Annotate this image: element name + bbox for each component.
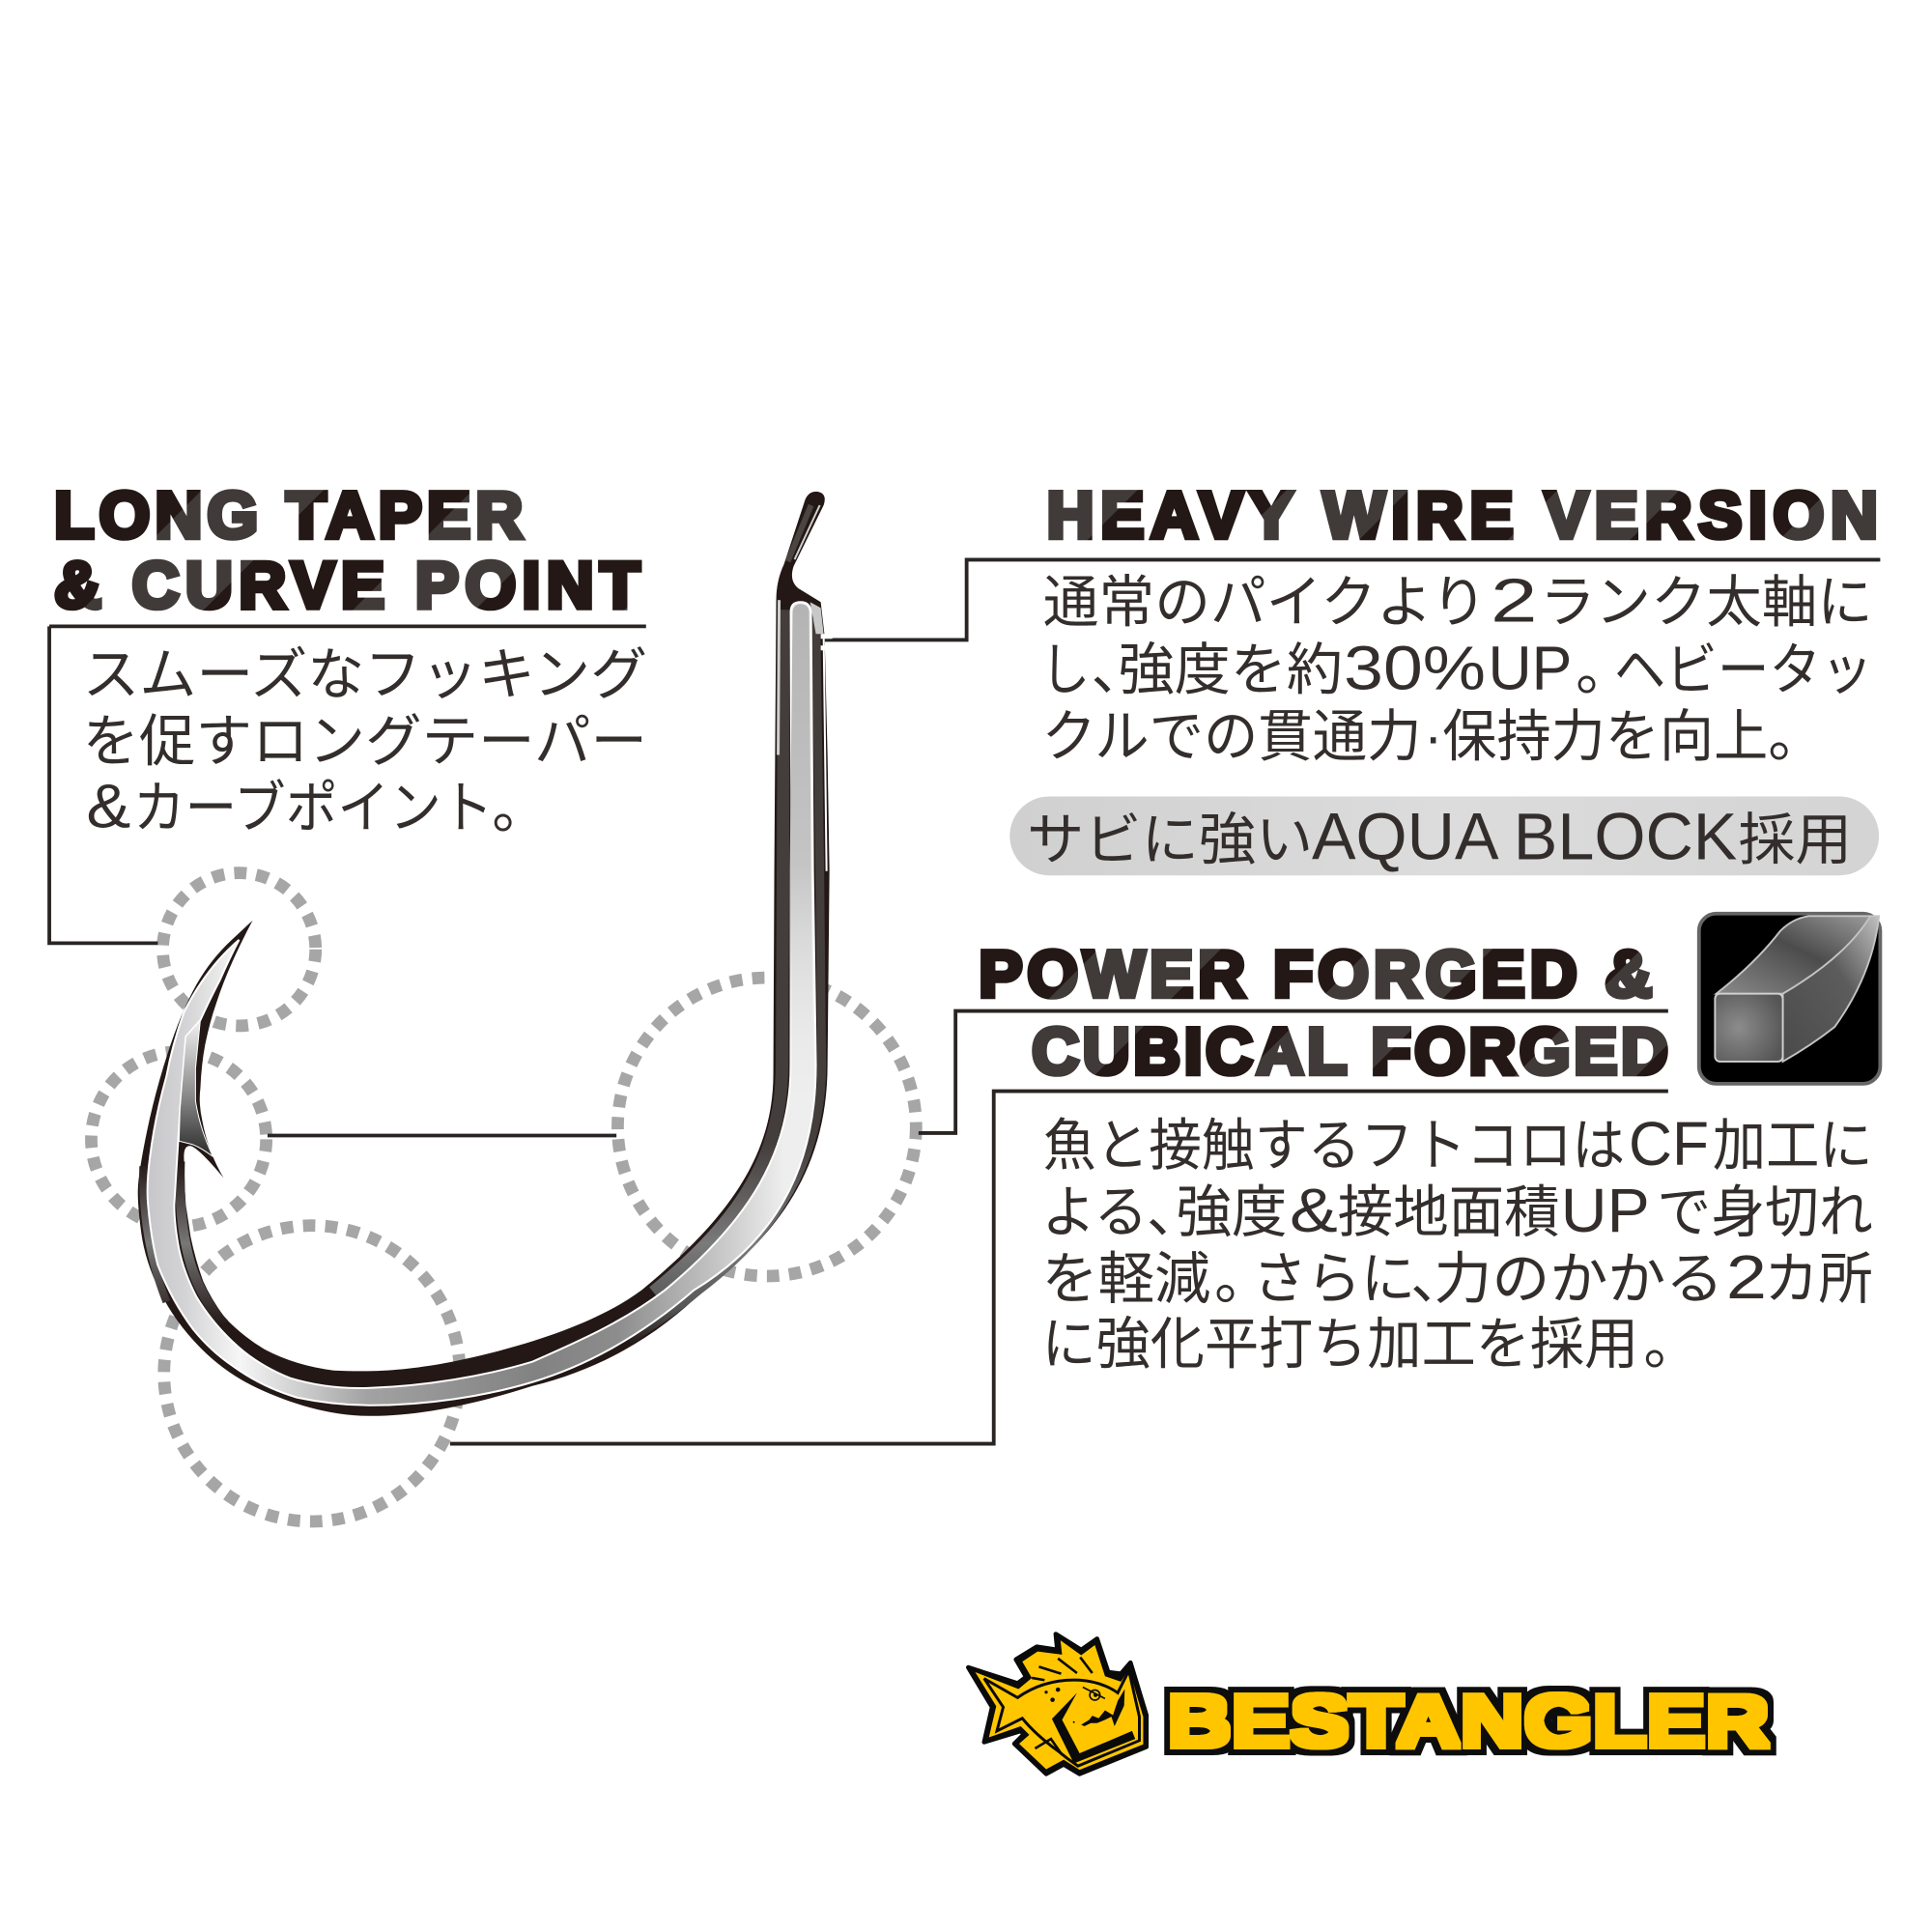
text: power forged: UP <box>1561 1176 1650 1245</box>
fish eye <box>1083 1687 1105 1700</box>
text: power forged <box>1041 1109 1873 1377</box>
text: power forged: 加工に <box>1713 1115 1873 1178</box>
fish jaw <box>1052 1692 1135 1764</box>
heading: long taper: & CURVE POINT <box>54 550 639 622</box>
fish rim <box>976 1640 1143 1770</box>
hook silhouette <box>138 492 830 1416</box>
text: long taper <box>83 644 647 840</box>
text: power forged: 、 <box>1147 1181 1204 1244</box>
text: power forged: 、 <box>1410 1248 1467 1311</box>
pill: aqua block <box>1009 797 1879 875</box>
fish outline <box>968 1634 1147 1774</box>
heading: power forged <box>979 938 1668 1089</box>
text: long taper: スムーズなフッキング <box>83 644 647 707</box>
fish body <box>984 1670 1139 1766</box>
text: long taper: を促すロングテーパー <box>83 710 647 773</box>
text: power forged: 2 <box>1726 1242 1767 1312</box>
text: heavy wire: 。 <box>1576 639 1633 701</box>
fish teeth <box>1081 1689 1124 1726</box>
logo: wordmark: BESTANGLER <box>1168 1680 1770 1761</box>
heading: long taper <box>54 479 639 622</box>
text: heavy wire: 、 <box>1092 639 1148 701</box>
pill: aqua block: サビに強い <box>1027 810 1313 872</box>
text: heavy wire: ヘビータッ <box>1614 639 1873 701</box>
text: heavy wire: 通常のパイクより <box>1043 571 1487 634</box>
text: heavy wire: 保持力を向上 <box>1442 705 1768 768</box>
text: power forged: & <box>1290 1176 1338 1245</box>
text: power forged: さらに <box>1253 1248 1415 1311</box>
text: power forged: で身切れ <box>1657 1181 1873 1244</box>
text: heavy wire <box>1040 565 1873 768</box>
text: heavy wire: 30% <box>1344 633 1486 702</box>
text: heavy wire: · <box>1424 705 1442 768</box>
text: power forged: 。 <box>1643 1314 1700 1377</box>
heading: power forged: POWER FORGED & <box>979 938 1652 1010</box>
text: heavy wire: クルでの貫通力 <box>1041 705 1422 768</box>
text: heavy wire: 2 <box>1491 565 1538 635</box>
text: heavy wire: し <box>1040 639 1090 701</box>
text: heavy wire: 強度を約 <box>1119 639 1343 701</box>
callout circles <box>91 873 916 1521</box>
heading: heavy wire: HEAVY WIRE VERSION <box>1047 479 1878 552</box>
text: power forged: 接地面積 <box>1338 1181 1560 1244</box>
text: power forged: に強化平打ち加工を採用 <box>1041 1314 1638 1377</box>
text: power forged: カ所 <box>1764 1248 1873 1311</box>
pill: aqua block: AQUA BLOCK <box>1312 800 1737 874</box>
text: power forged: を軽減 <box>1041 1248 1210 1311</box>
text: heavy wire: ランク太軸に <box>1540 571 1873 634</box>
hook steel ribbon <box>148 602 816 1406</box>
heading: long taper: LONG TAPER <box>54 479 523 552</box>
text: long taper: & <box>86 771 130 840</box>
hook illustration <box>138 492 833 1416</box>
text: power forged: 。 <box>1214 1248 1271 1311</box>
leader lines <box>49 559 1880 1444</box>
text: heavy wire: UP <box>1489 633 1572 702</box>
shank slivers <box>779 505 827 871</box>
text: long taper: 。 <box>492 777 549 839</box>
hook barb <box>179 1020 213 1156</box>
text: heavy wire: 。 <box>1768 705 1825 768</box>
shoulder highlight <box>810 602 824 634</box>
text: power forged: よる <box>1041 1181 1148 1244</box>
shank tone overlay <box>789 604 814 1122</box>
logo: fish <box>968 1634 1147 1774</box>
text: power forged: 力のかかる <box>1434 1248 1723 1311</box>
icon: forged square section <box>1699 914 1880 1084</box>
fish spots <box>1044 1688 1075 1723</box>
heading: power forged: CUBICAL FORGED <box>1032 1016 1668 1089</box>
shank and bend band tones <box>143 610 822 1341</box>
text: power forged: 強度 <box>1177 1181 1287 1244</box>
fish crest lines <box>1032 1658 1093 1755</box>
pill: aqua block: 採用 <box>1739 810 1852 872</box>
leader gap <box>821 634 833 650</box>
text: power forged: 魚と接触するフトコロは <box>1043 1115 1625 1178</box>
text: long taper: カーブポイント <box>133 777 494 839</box>
text: power forged: CF <box>1629 1109 1709 1179</box>
